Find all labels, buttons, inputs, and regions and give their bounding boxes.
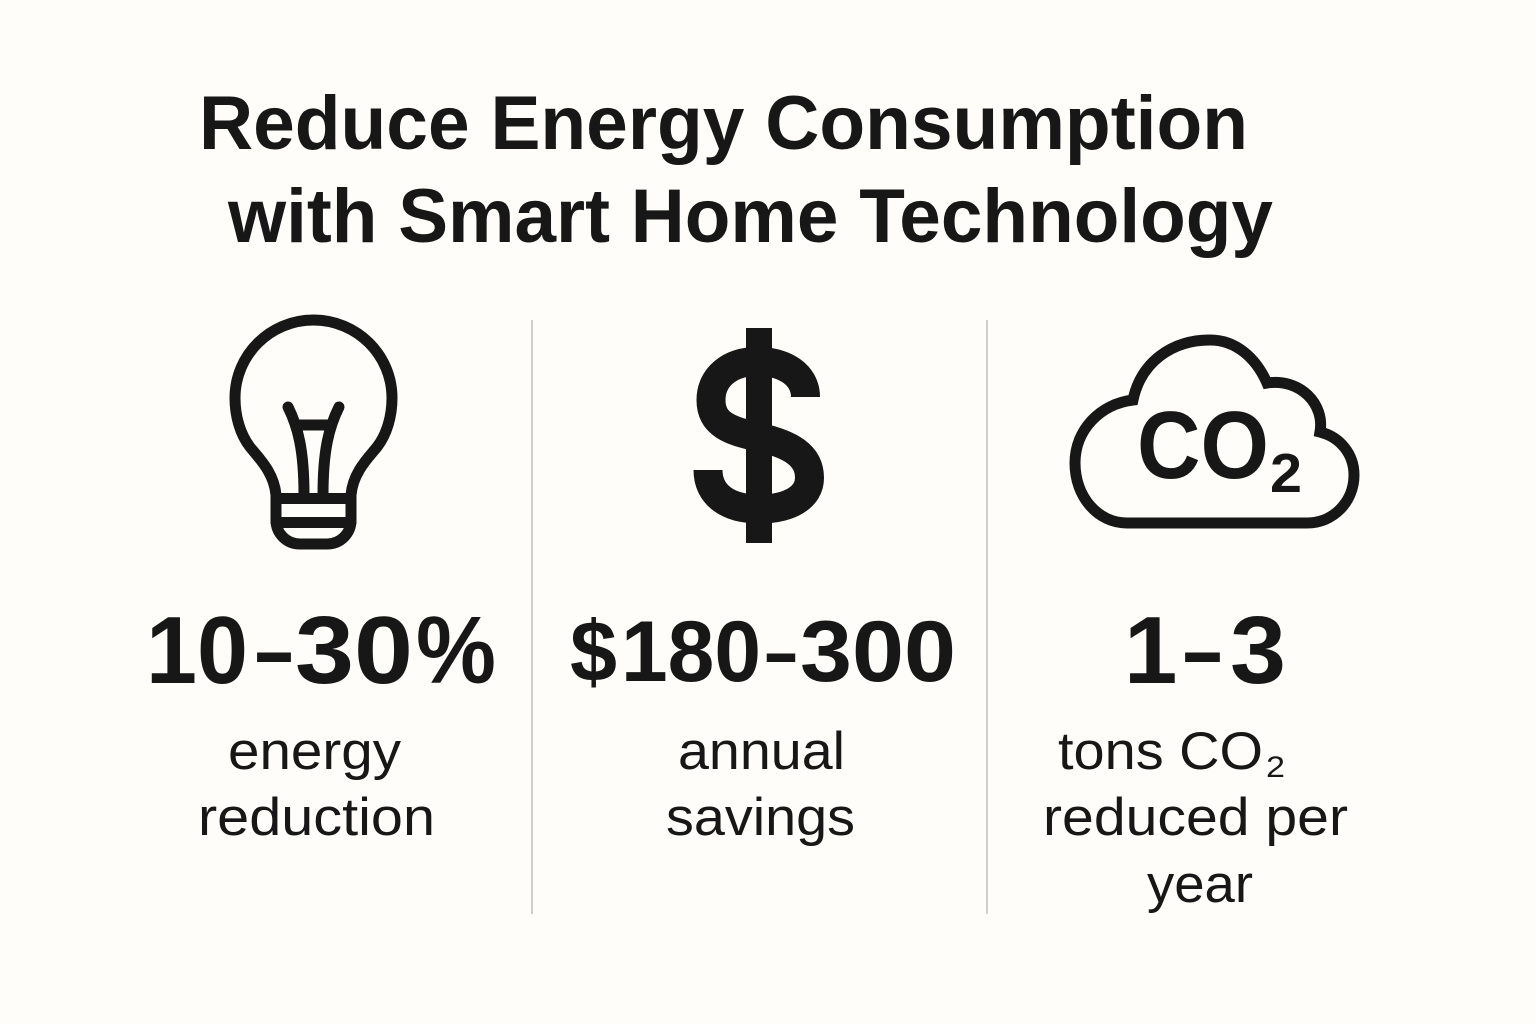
panel: energy reduction (146, 320, 496, 847)
label: tons CO2 reduced per year: year (1147, 855, 1253, 914)
stat: $180-300: 180 (621, 604, 761, 700)
stat: $180-300: $ (570, 604, 617, 700)
stat: 10-30%: 10 (146, 597, 248, 704)
stat: 10-30%: 30 (295, 597, 413, 704)
label: tons CO2 reduced per year (1043, 722, 1348, 914)
title: Reduce Energy Consumption (199, 81, 1248, 166)
stat: 10-30%: – (255, 597, 293, 704)
title (199, 81, 1273, 259)
label: tons CO2 reduced per year: 2 (1266, 751, 1285, 784)
label: tons CO2 reduced per year: reduced per (1043, 788, 1348, 847)
stat: 1-3: – (1183, 597, 1222, 704)
title: with Smart Home Technology (227, 174, 1273, 259)
stat: 10-30%: % (416, 597, 496, 704)
label: annual savings: savings (666, 788, 855, 847)
stat: 1-3: 3 (1230, 597, 1286, 704)
icon: CO2 cloud (1075, 340, 1354, 523)
label: energy reduction (198, 722, 435, 847)
stat: $180-300: 300 (800, 604, 956, 700)
label: energy reduction: energy (228, 722, 402, 781)
panel: annual savings (570, 328, 956, 847)
label: annual savings (666, 722, 855, 847)
label: energy reduction: reduction (198, 788, 435, 847)
label: annual savings: annual (678, 722, 845, 781)
icon: CO2 cloud: 2 (1270, 442, 1302, 504)
stat: 1-3: 1 (1124, 597, 1177, 704)
icon: dollar sign (708, 328, 810, 543)
icon: CO2 cloud: CO (1137, 392, 1269, 499)
icon: light bulb (235, 320, 392, 544)
stat: $180-300: – (765, 604, 797, 700)
label: tons CO2 reduced per year: tons CO (1058, 722, 1263, 781)
panel: CO2 reduced (1043, 340, 1354, 914)
